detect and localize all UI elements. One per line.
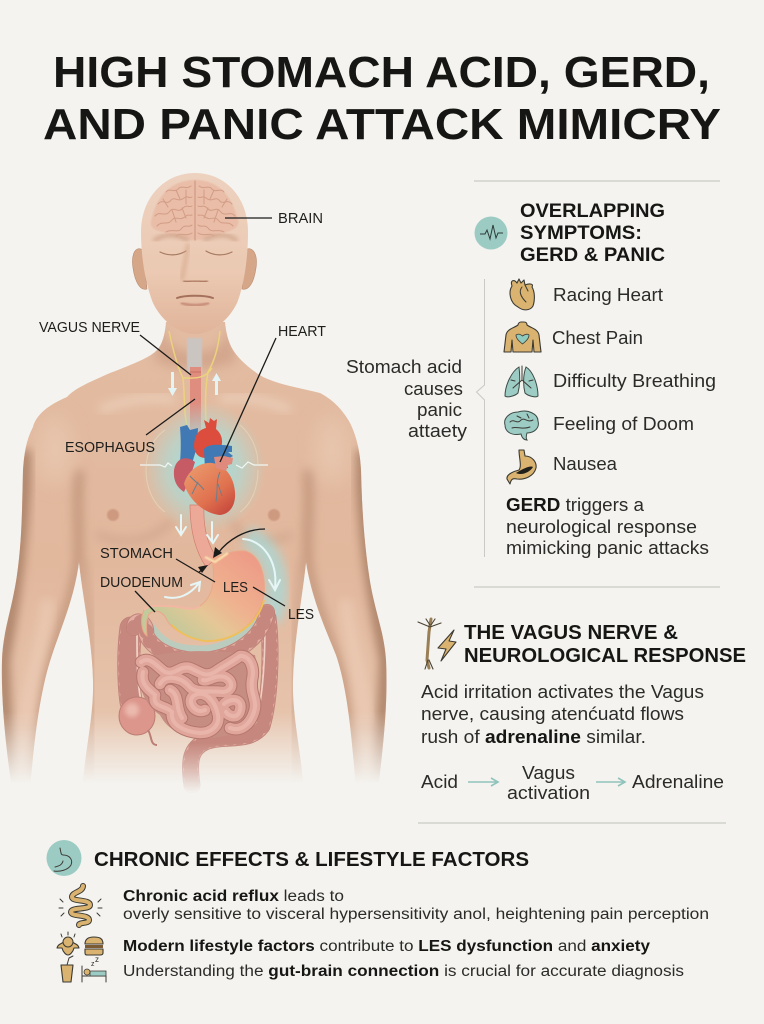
text: gerd summary: GERD triggers a	[506, 495, 645, 515]
anatomy labels: ESOPHAGUS	[65, 440, 155, 456]
flow arrows	[165, 515, 280, 598]
heading: vagus nerve	[464, 622, 746, 667]
stomach glow	[246, 536, 277, 620]
heart	[174, 418, 235, 515]
anatomy labels: BRAIN	[278, 211, 323, 227]
anatomy labels	[39, 211, 326, 623]
text: gut-brain connection: Understanding the gut-brain connection is crucial for accurate diagnosis	[123, 963, 684, 980]
icon: bed: z	[95, 955, 99, 964]
anatomical figure	[2, 173, 387, 790]
black arrows and leader lines	[135, 218, 285, 612]
icon: pulse in teal circle	[474, 216, 508, 250]
side note: Stomach acid	[346, 357, 462, 377]
neck tube and esophagus	[187, 338, 202, 433]
title: HIGH STOMACH ACID, GERD,	[53, 48, 710, 97]
nerve arrows	[168, 372, 221, 396]
text: nausea: Nausea	[553, 454, 618, 474]
text: gerd summary: mimicking panic attacks	[506, 538, 709, 558]
icon: chest pain	[504, 322, 541, 352]
heading: vagus nerve: THE VAGUS NERVE &	[464, 622, 678, 644]
arrow: acid to vagus	[468, 778, 498, 786]
flow: acid to adrenaline: Acid	[421, 772, 458, 792]
heading: overlapping symptoms: GERD & PANIC	[520, 244, 665, 266]
text: chronic acid reflux: Chronic acid reflux leads to	[123, 888, 344, 905]
panel: chronic effects	[46, 840, 709, 982]
title	[43, 48, 721, 149]
face	[155, 235, 236, 305]
icon: racing heart	[510, 279, 534, 310]
icon: stomach nausea	[507, 450, 536, 484]
text: lifestyle factors: Modern lifestyle factors contribute to LES dysfunction and anxiety	[123, 938, 650, 955]
heart glow	[142, 402, 266, 534]
heading: overlapping symptoms	[520, 200, 665, 266]
icon: brain	[505, 411, 538, 440]
anatomy labels: LES	[223, 580, 248, 596]
torso and arms	[2, 322, 387, 790]
small intestine	[139, 651, 257, 738]
icon: nerve and lightning	[418, 619, 456, 669]
text: vagus explanation: Acid irritation activates the Vagus	[421, 682, 704, 702]
nipples	[107, 509, 280, 521]
icon: burger	[85, 937, 103, 955]
heading: vagus nerve: NEUROLOGICAL RESPONSE	[464, 645, 746, 667]
anatomy labels: HEART	[278, 324, 326, 340]
side note	[346, 357, 467, 441]
icon: bed	[82, 955, 106, 982]
stomach	[142, 551, 264, 641]
icons: lifestyle factors	[57, 932, 106, 982]
large intestine	[129, 612, 270, 785]
icon: intestine	[59, 886, 102, 925]
heading: overlapping symptoms: SYMPTOMS:	[520, 222, 642, 244]
brain	[151, 180, 238, 240]
bracket line	[476, 279, 484, 557]
text: difficulty breathing: Difficulty Breathing	[553, 371, 716, 391]
text: vagus explanation: nerve, causing atenćuatd flows	[421, 704, 684, 724]
anatomy labels: LES	[288, 607, 314, 623]
head	[132, 173, 256, 334]
text: gerd summary	[506, 495, 709, 558]
ears	[132, 249, 256, 289]
text: chest pain: Chest Pain	[552, 328, 643, 348]
heading: overlapping symptoms: OVERLAPPING	[520, 200, 665, 222]
icon: drink	[61, 956, 73, 982]
text: vagus explanation: rush of adrenaline similar.	[421, 727, 646, 747]
panel: vagus nerve	[418, 587, 746, 823]
anatomy labels: VAGUS NERVE	[39, 320, 140, 336]
cecum	[119, 697, 157, 745]
text: vagus explanation	[421, 682, 704, 747]
lower esophagus	[190, 505, 217, 567]
icon: bed: z	[91, 961, 95, 968]
text: feeling of doom: Feeling of Doom	[553, 414, 694, 434]
text: chronic acid reflux	[123, 888, 709, 923]
vagus nerves	[169, 331, 220, 425]
text: gerd summary: neurological response	[506, 517, 697, 537]
arrow: vagus to adrenaline	[596, 778, 625, 786]
side note: panic	[417, 400, 462, 420]
title: AND PANIC ATTACK MIMICRY	[43, 100, 721, 149]
side note: causes	[404, 379, 463, 399]
icon: stomach in teal circle	[46, 840, 82, 876]
icon: lungs	[505, 366, 538, 397]
anatomy labels: STOMACH	[100, 546, 173, 562]
flow: acid to adrenaline: Vagus	[522, 763, 575, 783]
flow: acid to adrenaline: Adrenaline	[632, 772, 724, 792]
anatomy labels: DUODENUM	[100, 575, 183, 591]
panel: overlapping symptoms	[346, 181, 720, 558]
flow: acid to adrenaline	[421, 763, 724, 803]
heading: chronic effects: CHRONIC EFFECTS & LIFESTYLE FACTORS	[94, 849, 529, 871]
side note: attaety	[408, 421, 467, 441]
icon: stressed person	[57, 932, 79, 955]
text: chronic acid reflux: overly sensitive to visceral hypersensitivity anol, heightening pain perception	[123, 906, 709, 923]
text: racing heart: Racing Heart	[553, 285, 663, 305]
flow: acid to adrenaline: activation	[507, 783, 590, 803]
